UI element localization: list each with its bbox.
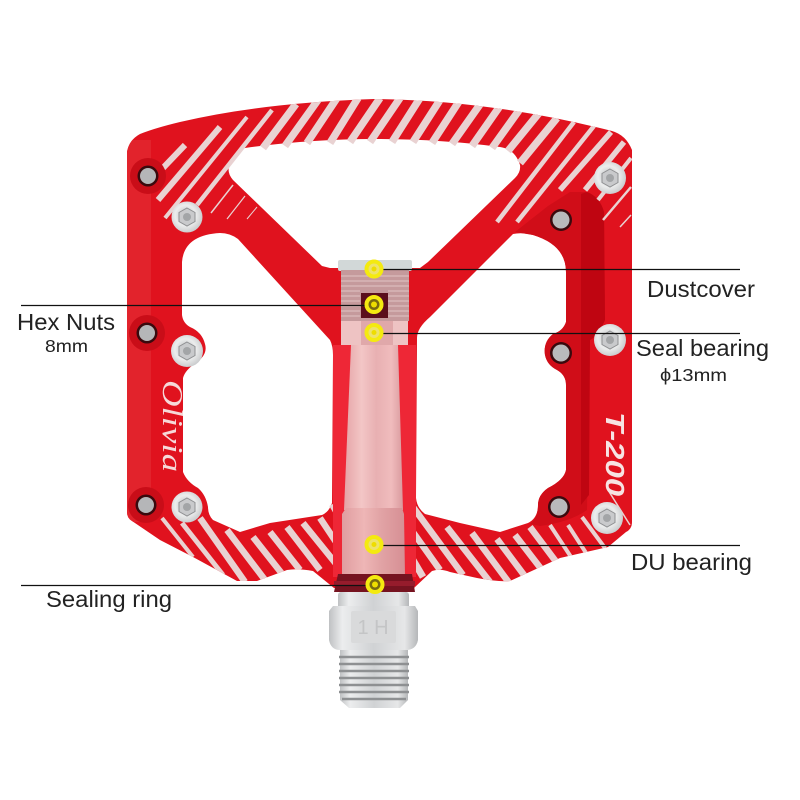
pin middle right xyxy=(550,342,572,364)
label: Hex Nuts xyxy=(17,309,115,356)
dustcover xyxy=(338,260,412,271)
marker: seal bearing xyxy=(366,325,382,340)
bolt bottom right xyxy=(591,502,623,534)
tapered tube xyxy=(344,345,403,510)
label: Hex Nuts: 8mm xyxy=(45,336,88,356)
hex body xyxy=(329,606,418,650)
sealing ring xyxy=(334,574,415,592)
marker: hex nuts xyxy=(366,297,382,312)
label: Hex Nuts: Hex Nuts xyxy=(17,309,115,335)
shaft red surround xyxy=(333,345,416,577)
threaded spindle xyxy=(339,650,409,708)
bolt top right xyxy=(594,162,626,194)
left tapered stripes xyxy=(158,110,272,219)
label: Seal bearing: ϕ13mm xyxy=(660,365,727,385)
threaded section xyxy=(341,270,409,321)
pin bottom left xyxy=(128,487,164,523)
bolt middle right xyxy=(594,324,626,356)
pin top left xyxy=(130,158,166,194)
right tapered stripes xyxy=(497,122,631,227)
model number: T-200 xyxy=(600,412,630,497)
infographic: pedal diagram xyxy=(18,99,768,708)
brand logo: Olivia xyxy=(156,380,187,472)
marker: DU bearing xyxy=(366,537,382,552)
pins and bolts xyxy=(128,158,626,534)
raised right band xyxy=(515,192,605,526)
darker left edge strip xyxy=(127,140,151,522)
label: Seal bearing: Seal bearing xyxy=(636,335,769,361)
hex body: 1 H xyxy=(357,617,389,639)
marker: dustcover xyxy=(366,262,382,276)
bottom stripes xyxy=(162,490,630,584)
hex nut socket xyxy=(361,293,388,318)
label: Dustcover: Dustcover xyxy=(647,276,755,302)
label: Seal bearing xyxy=(636,335,769,385)
seal bearing xyxy=(341,321,408,345)
bolt bottom left xyxy=(172,492,202,522)
pin bottom right xyxy=(548,496,570,518)
label: DU bearing: DU bearing xyxy=(631,549,752,575)
bolt top left xyxy=(172,202,202,232)
label: Sealing ring: Sealing ring xyxy=(46,586,172,612)
bolt middle left xyxy=(171,335,203,367)
top band stripes xyxy=(263,98,557,163)
pin top right xyxy=(550,209,572,231)
leader lines xyxy=(21,270,740,586)
pin middle left xyxy=(129,315,165,351)
marker: sealing ring xyxy=(368,577,382,592)
pedal body xyxy=(127,99,632,588)
raised right band inner strip xyxy=(581,192,605,505)
diagonal stripes xyxy=(158,98,631,584)
DU bearing sleeve xyxy=(342,508,405,576)
silver collar xyxy=(338,592,409,609)
axle shaft cutaway xyxy=(329,260,418,708)
